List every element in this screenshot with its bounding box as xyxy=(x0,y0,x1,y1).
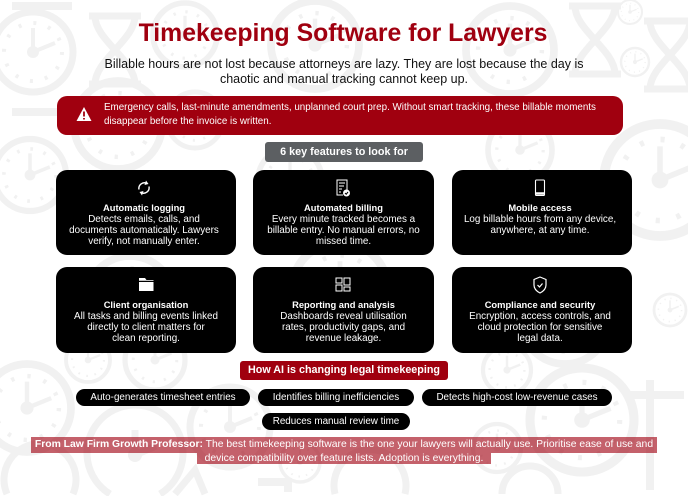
card text: rates, productivity gaps, and xyxy=(282,322,405,333)
title: Timekeeping Software for Lawyers xyxy=(139,20,547,47)
card: client organisation xyxy=(56,267,236,353)
heading: how AI is changing: How AI is changing legal timekeeping xyxy=(248,364,440,376)
heading: 6 key features: 6 key features to look for xyxy=(280,146,408,158)
card text: Encryption, access controls, and xyxy=(469,311,611,322)
card title: Compliance and security xyxy=(485,300,595,310)
icon: invoice check xyxy=(336,180,350,196)
icon: refresh arrows xyxy=(138,180,150,196)
card text: clean reporting. xyxy=(112,333,180,344)
pill: manual review: Reduces manual review time xyxy=(273,416,399,427)
heading: 6 key features xyxy=(265,142,423,162)
card title: Reporting and analysis xyxy=(292,300,395,310)
card text xyxy=(280,311,407,344)
icon: warning triangle xyxy=(76,107,92,121)
card text: billable entry. No manual errors, no xyxy=(267,225,420,236)
card text xyxy=(267,214,420,247)
card: compliance and security xyxy=(452,267,632,353)
subtitle: Billable hours are not lost because attorneys are lazy. They are lost because the day is xyxy=(104,57,583,71)
icon: shield check xyxy=(533,276,547,294)
card text xyxy=(74,311,218,344)
note line 1 xyxy=(31,437,657,453)
card text xyxy=(469,311,611,344)
icon: folder xyxy=(139,278,154,291)
card title: Automated billing xyxy=(304,203,383,213)
card: reporting and analysis xyxy=(253,267,434,353)
note line 1: From Law Firm Growth Professor: The best timekeeping software is the one your lawyers will actually use. Prioritise ease of use and xyxy=(35,439,653,450)
professor note xyxy=(31,437,657,464)
card title: Automatic logging xyxy=(103,203,185,213)
card text: directly to client matters for xyxy=(87,322,205,333)
card title: Mobile access xyxy=(508,203,572,213)
card title: Client organisation xyxy=(104,300,188,310)
card text xyxy=(464,214,616,236)
card: automated billing xyxy=(253,170,434,255)
card text: cloud protection for sensitive xyxy=(478,322,602,333)
subtitle xyxy=(104,57,583,86)
card text: Detects emails, calls, and xyxy=(88,214,200,225)
card text: verify, not manually enter. xyxy=(88,236,200,247)
card text: legal data. xyxy=(517,333,563,344)
alert text: Emergency calls, last-minute amendments, unplanned court prep. Without smart tracking, these billable moments xyxy=(104,102,596,113)
pill: manual review xyxy=(262,413,410,430)
card text: documents automatically. Lawyers xyxy=(69,225,219,236)
card text xyxy=(69,214,219,247)
alert banner xyxy=(57,96,623,135)
subtitle: chaotic and manual tracking cannot keep up. xyxy=(220,72,468,86)
pill: auto-generates xyxy=(76,389,250,406)
card text: Log billable hours from any device, xyxy=(464,214,616,225)
heading: how AI is changing xyxy=(240,361,448,380)
icon: phone xyxy=(534,180,546,196)
pill: billing inefficiencies xyxy=(258,389,414,406)
pill: billing inefficiencies: Identifies billing inefficiencies xyxy=(273,392,399,403)
note line 2: device compatibility over feature lists. Adoption is everything. xyxy=(205,453,483,464)
pill: high-cost cases xyxy=(422,389,612,406)
pill: auto-generates: Auto-generates timesheet entries xyxy=(90,392,236,403)
alert text: disappear before the invoice is written. xyxy=(104,116,271,127)
pill: high-cost cases: Detects high-cost low-revenue cases xyxy=(436,392,598,403)
icon: dashboard xyxy=(336,278,350,292)
card text: anywhere, at any time. xyxy=(490,225,590,236)
card text: All tasks and billing events linked xyxy=(74,311,218,322)
card text: Every minute tracked becomes a xyxy=(272,214,415,225)
alert text xyxy=(104,102,596,127)
card text: revenue leakage. xyxy=(306,333,381,344)
card: mobile access xyxy=(452,170,632,255)
card: automatic logging xyxy=(56,170,236,255)
card text: missed time. xyxy=(316,236,371,247)
card text: Dashboards reveal utilisation xyxy=(280,311,407,322)
